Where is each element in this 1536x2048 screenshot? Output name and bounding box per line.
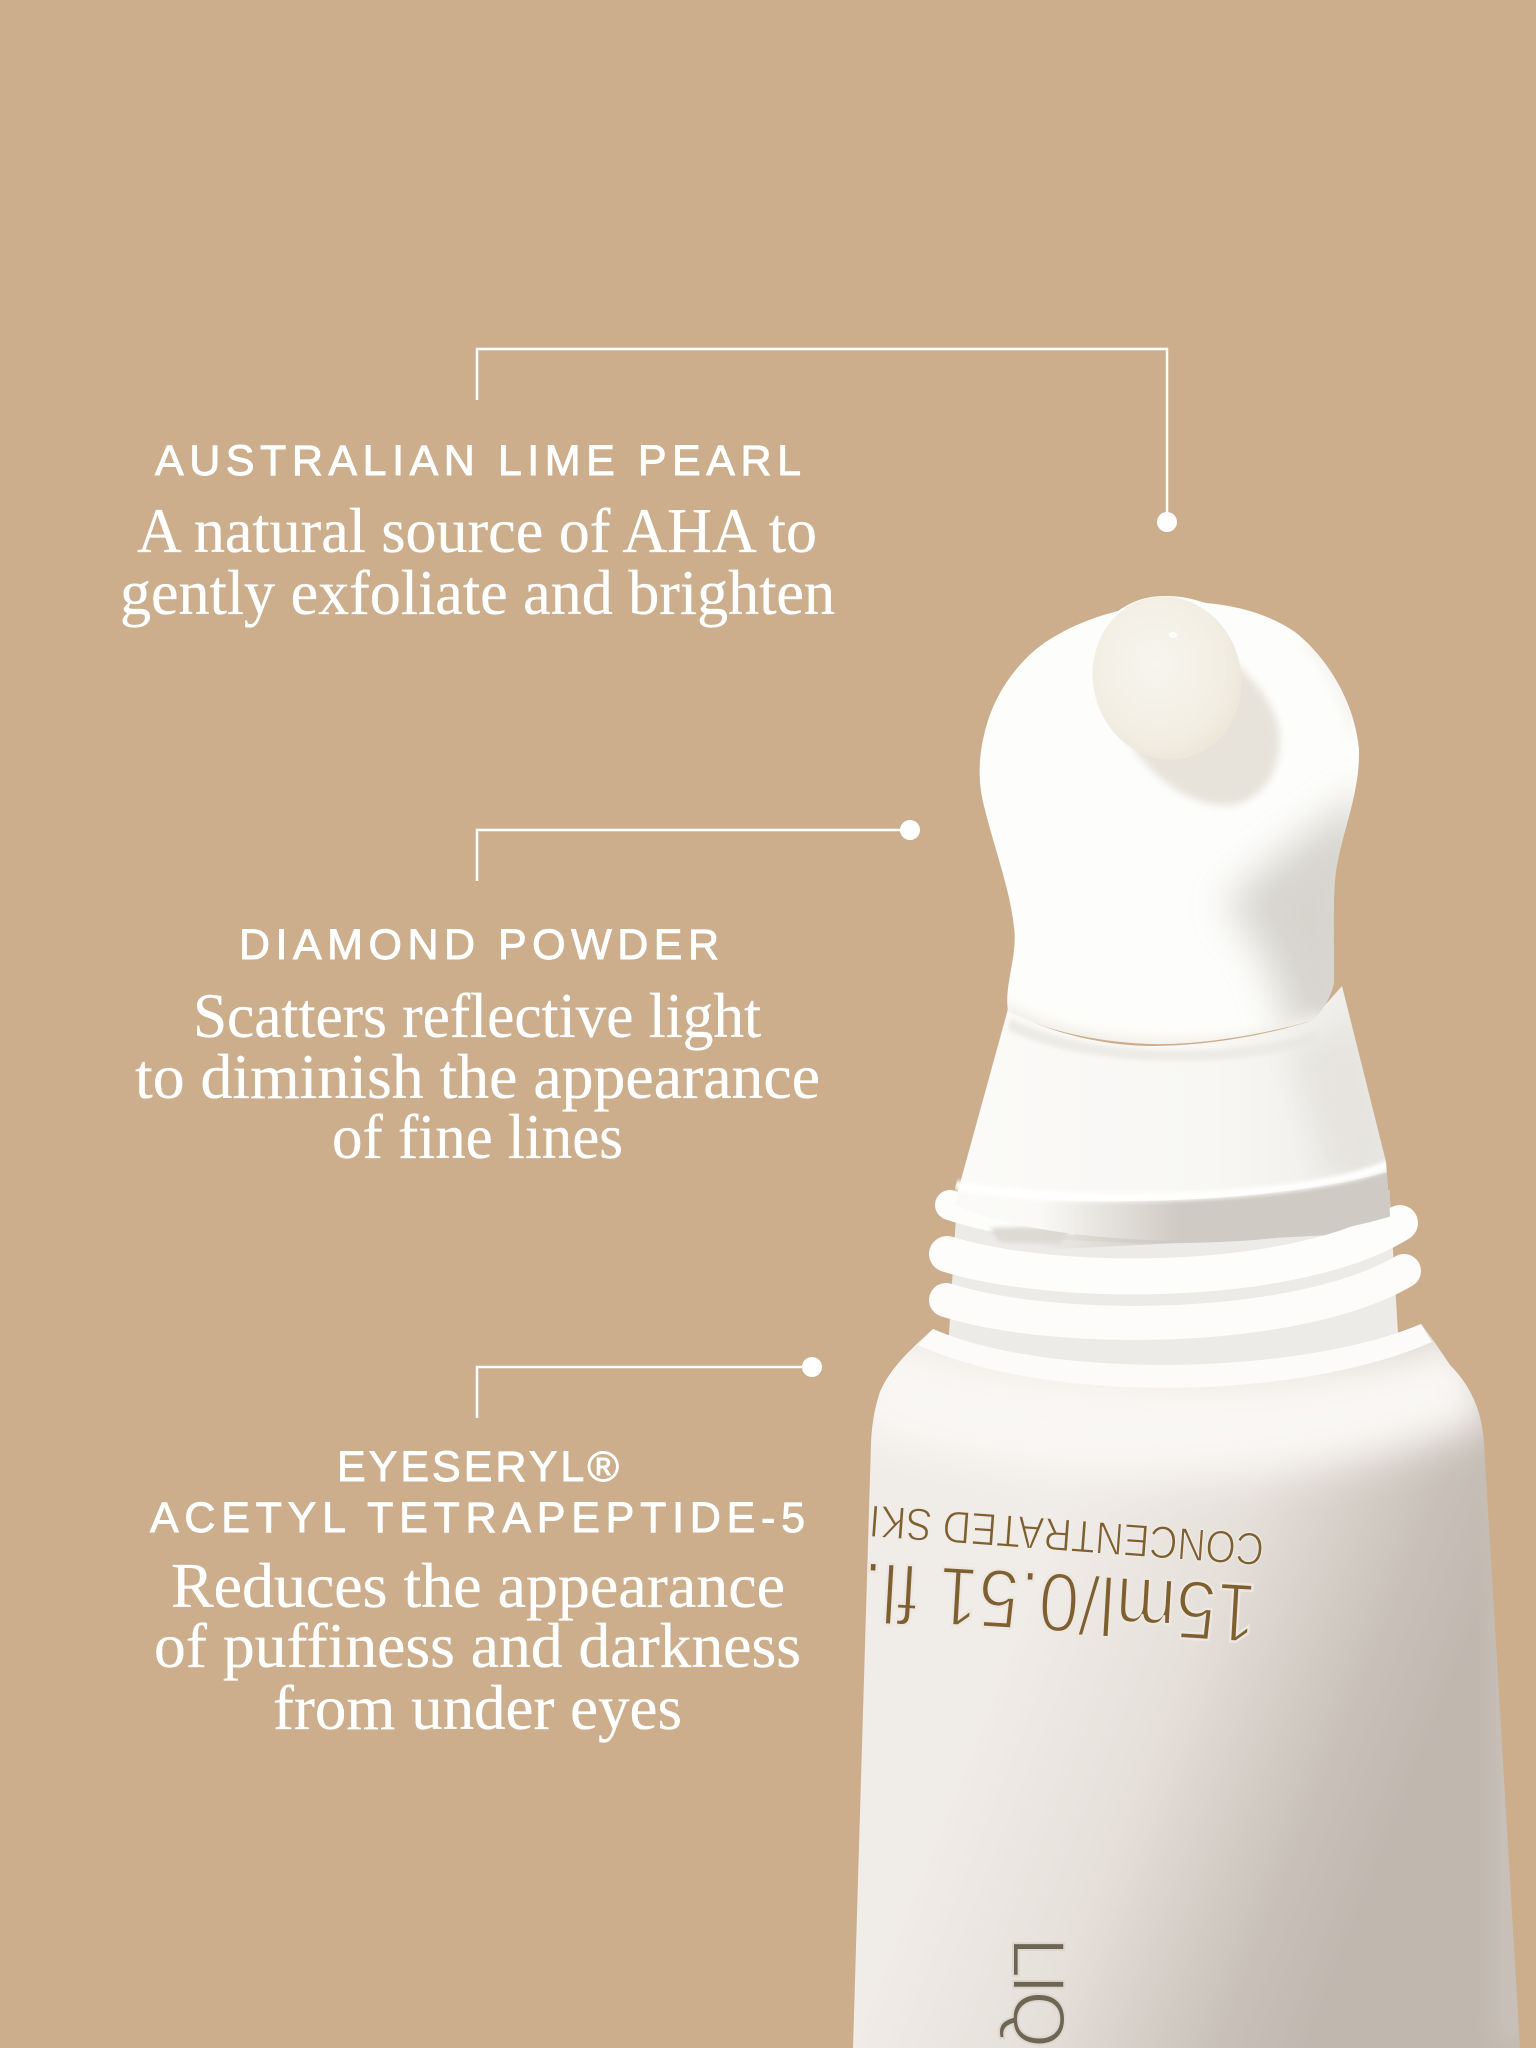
description 2: Scatters reflective light (193, 981, 761, 1051)
description 1: gently exfoliate and brighten (120, 558, 835, 628)
infographic canvas (122, 348, 1520, 2048)
heading 3: ACETYL TETRAPEPTIDE-5 (150, 1494, 805, 1542)
description 3 (154, 1551, 801, 1743)
tube label: concentrated skincare: CONCENTRATED SKINCARE (731, 1485, 1266, 1576)
description 3: from under eyes (273, 1673, 682, 1743)
connector line 3 (477, 1357, 822, 1418)
description 1 (120, 496, 835, 628)
heading 3: EYESERYL® (337, 1443, 619, 1491)
collar (955, 986, 1395, 1243)
callout 3: Eyeseryl (150, 1357, 822, 1743)
cream bulb on applicator (980, 596, 1370, 1060)
cream dimple shadow (1125, 655, 1280, 806)
callout 1: Australian Lime Pearl (120, 349, 1177, 628)
callout 2: Diamond Powder (135, 820, 920, 1172)
connector line 1 (477, 349, 1177, 532)
heading 1: AUSTRALIAN LIME PEARL (155, 437, 801, 485)
connector line 2 (477, 820, 920, 881)
description 3: of puffiness and darkness (154, 1611, 801, 1681)
heading 3 (150, 1443, 805, 1542)
bead highlight (1169, 632, 1177, 638)
description 2: to diminish the appearance (135, 1042, 820, 1112)
description 1: A natural source of AHA to (137, 496, 817, 566)
description 2 (135, 981, 820, 1172)
tube label: volume: 15ml/0.51 fl.oz (782, 1540, 1259, 1661)
heading 2: DIAMOND POWDER (239, 921, 719, 969)
product: cream tube (804, 596, 1520, 2048)
cream bead (1075, 581, 1259, 775)
neck threads (945, 1190, 1404, 1400)
tube shoulder rim (918, 1324, 1432, 1388)
description 3: Reduces the appearance (171, 1551, 785, 1621)
tube body (853, 1324, 1520, 2048)
description 2: of fine lines (332, 1102, 623, 1172)
tube label: product name: LIQ (997, 1937, 1080, 2048)
